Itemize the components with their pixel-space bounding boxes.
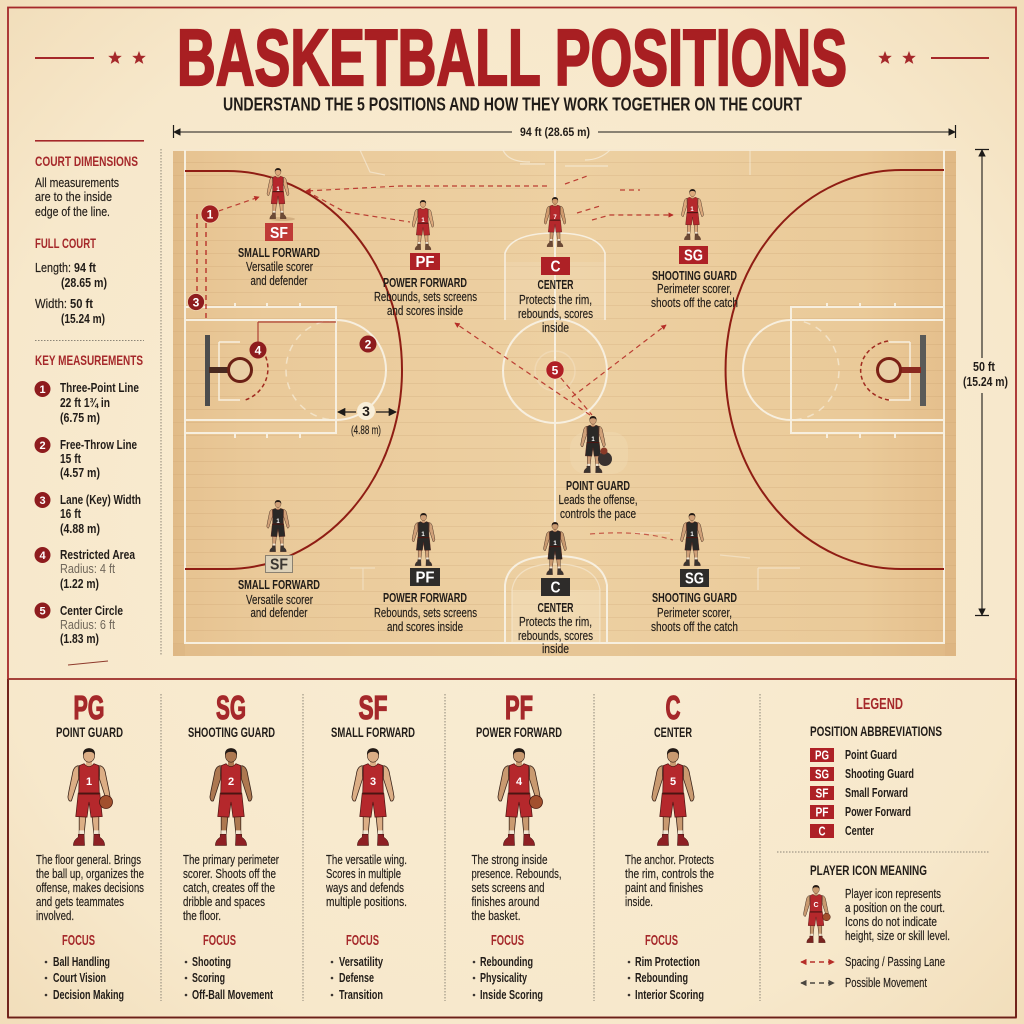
panel: shooting guard: FOCUS: [203, 932, 236, 949]
key marker 2: [360, 336, 376, 352]
player: power forward, red team: POWER FORWARD: [383, 275, 467, 290]
player: power forward, red team: 1: [421, 218, 425, 224]
panel: shooting guard: SHOOTING GUARD: [188, 724, 275, 740]
player: center, black team: 1: [553, 541, 557, 547]
panel: legend: LEGEND: [856, 696, 903, 713]
legend row: PF: [810, 805, 911, 820]
key marker 2: 2: [365, 338, 372, 352]
player: small forward, red team: SF: [270, 225, 288, 242]
arrow: spacing / passing lane: [801, 961, 834, 963]
label: possible movement: Possible Movement: [845, 976, 927, 990]
player: small forward, red team: Versatile scorer: [246, 260, 313, 274]
panel: power forward: FOCUS: [491, 932, 524, 949]
player: small forward, black team: [238, 500, 320, 620]
legend row: PF: Power Forward: [845, 805, 911, 819]
player: small forward, red team: and defender: [250, 274, 308, 288]
text block: full court size: (28.65 m): [61, 275, 107, 290]
player: shooting guard, black team: Perimeter scorer,: [657, 606, 732, 620]
icon: shooting guard player: [210, 748, 252, 846]
player: small forward, black team: 1: [276, 519, 280, 525]
panel: point guard: The floor general. Brings: [36, 852, 141, 867]
panel: point guard: FOCUS: [62, 932, 95, 949]
panel: point guard: and gets teammates: [36, 894, 124, 909]
player: shooting guard, red team: SG: [684, 248, 703, 264]
icon: power forward player: 4: [516, 776, 523, 788]
icon: point guard player: [68, 748, 112, 846]
text block: full court size: [35, 260, 107, 326]
icon: center player: [652, 748, 694, 846]
player: small forward, black team: and defender: [250, 606, 308, 620]
lane width callout: (4.88 m): [351, 423, 381, 437]
text block: full court size: 94 ft: [74, 260, 97, 275]
key marker 3: [188, 294, 204, 310]
player: shooting guard, red team: SHOOTING GUARD: [652, 268, 737, 283]
player: center, black team: inside: [542, 642, 569, 656]
player: power forward, black team: POWER FORWARD: [383, 590, 467, 605]
measurement 2: 15 ft: [60, 451, 82, 466]
key marker 1: [201, 205, 219, 223]
player: shooting guard, red team: shoots off the catch: [651, 296, 738, 310]
measurement 1: [34, 380, 139, 425]
measurement 4: 4: [39, 550, 46, 562]
text block: full court size: Width:: [35, 296, 67, 311]
player: power forward, red team: PF: [416, 254, 435, 271]
player: point guard, black team: POINT GUARD: [566, 478, 630, 493]
player: small forward, black team: SMALL FORWARD: [238, 577, 320, 592]
key marker 1: 1: [207, 208, 214, 222]
measurement 2: Free-Throw Line: [60, 437, 137, 452]
player: small forward, black team: Versatile scorer: [246, 593, 313, 607]
legend row: SF: SF: [816, 786, 829, 800]
panel: power forward: Inside Scoring: [480, 987, 543, 1002]
panel: center: The anchor. Protects: [625, 852, 714, 867]
panel: legend: POSITION ABBREVIATIONS: [810, 723, 942, 739]
player: shooting guard, black team: 1: [690, 532, 694, 538]
panel: small forward: ways and defends: [325, 880, 404, 895]
icon: small forward player: 3: [370, 776, 376, 788]
legend row: SF: Small Forward: [845, 786, 908, 800]
text block: measurement note: [35, 175, 119, 219]
panel: shooting guard: The primary perimeter: [183, 852, 279, 867]
player: shooting guard, red team: 1: [690, 207, 694, 213]
panel: small forward: SF: [358, 689, 388, 726]
player: center, black team: CENTER: [538, 600, 574, 615]
panel: point guard: offense, makes decisions: [36, 880, 144, 895]
heading: full court: FULL COURT: [35, 235, 96, 251]
panel: small forward: Transition: [339, 987, 383, 1002]
decoration: right stars and line: [878, 51, 989, 64]
player: shooting guard, red team: [651, 189, 738, 310]
panel: shooting guard: Off-Ball Movement: [192, 987, 273, 1002]
measurement 4: Radius: 4 ft: [60, 561, 115, 576]
measurement 5: (1.83 m): [60, 631, 99, 646]
player: center, black team: [518, 522, 593, 656]
panel: center: paint and finishes: [625, 880, 703, 895]
icon: power forward player: [498, 748, 542, 846]
player: shooting guard, red team: Perimeter scorer,: [657, 282, 732, 296]
panel: power forward: PF: [505, 689, 533, 726]
player: small forward, red team: 1: [276, 187, 280, 193]
player: power forward, red team: [374, 200, 477, 318]
panel: point guard: PG: [74, 689, 104, 726]
measurement 2: [34, 437, 137, 480]
measurement 3: 3: [39, 495, 46, 507]
court floor: [173, 149, 956, 656]
arrow: possible movement: [801, 982, 834, 984]
text block: player icon note: [845, 887, 950, 943]
text block: full court size: Length:: [35, 260, 71, 275]
panel: power forward: POWER FORWARD: [476, 724, 562, 740]
player: center, black team: C: [550, 580, 561, 596]
panel: point guard: the ball up, organizes the: [36, 866, 144, 881]
measurement 3: 16 ft: [60, 506, 82, 521]
panel: shooting guard: SG: [216, 689, 246, 726]
measurement 1: Three-Point Line: [60, 380, 139, 395]
player: small forward, red team: SMALL FORWARD: [238, 245, 320, 260]
measurement 4: Restricted Area: [60, 547, 136, 562]
legend row: PG: [810, 748, 897, 762]
panel: small forward: Defense: [339, 970, 374, 985]
panel: center: C: [666, 689, 680, 726]
text block: full court size: 50 ft: [70, 296, 94, 311]
panel: shooting guard: Shooting: [192, 954, 231, 969]
court length dimension: 94 ft (28.65 m): [520, 125, 590, 139]
column dividers: [161, 694, 760, 1001]
legend row: SG: SG: [815, 768, 829, 782]
measurement 5: 5: [39, 606, 46, 618]
player: center, red team: C: [550, 258, 561, 276]
measurement 5: Radius: 6 ft: [60, 617, 115, 632]
player: point guard, black team: [558, 416, 638, 521]
backboard and rim left: [205, 335, 268, 406]
player: power forward, black team: Rebounds, sets screens: [374, 606, 477, 620]
measurement 2: (4.57 m): [60, 465, 100, 480]
court lines: [185, 150, 944, 643]
player: center, black team: Protects the rim,: [519, 615, 592, 629]
panel: power forward: [472, 689, 562, 1002]
player: shooting guard, black team: SHOOTING GUARD: [652, 590, 737, 605]
text block: measurement note: are to the inside: [35, 189, 112, 204]
panel: shooting guard: [183, 689, 279, 1002]
basketball court: [173, 149, 956, 656]
text block: player icon note: Icons do not indicate: [845, 915, 937, 929]
panel: shooting guard: catch, creates off the: [183, 880, 275, 895]
measurement 1: 1: [39, 384, 46, 396]
panel: small forward: multiple positions.: [326, 894, 407, 909]
player: power forward, red team: and scores inside: [387, 304, 463, 318]
panel: small forward: Scores in multiple: [326, 866, 401, 881]
measurement 2: 2: [39, 440, 46, 452]
legend row: C: C: [818, 824, 826, 838]
icon: small forward player: [352, 748, 394, 846]
legend row: C: [810, 824, 874, 838]
heading: court dimensions: COURT DIMENSIONS: [35, 153, 138, 169]
icon: center player: 5: [670, 776, 676, 788]
panel: point guard: Court Vision: [53, 970, 106, 985]
panel: power forward: presence. Rebounds,: [472, 866, 562, 881]
panel: power forward: Rebounding: [480, 954, 533, 969]
panel: small forward: FOCUS: [346, 932, 379, 949]
panel: shooting guard: dribble and spaces: [183, 894, 265, 909]
player: point guard, black team: Leads the offense,: [558, 493, 638, 507]
legend row: PF: PF: [816, 806, 829, 820]
decoration: left line and stars: [35, 51, 146, 64]
panel: legend: PLAYER ICON MEANING: [810, 862, 927, 878]
player: center, black team: rebounds, scores: [518, 629, 593, 643]
measurement 5: [34, 602, 123, 646]
panel: center: Rebounding: [635, 970, 688, 985]
legend row: PG: Point Guard: [845, 748, 897, 762]
measurement 3: [34, 492, 141, 536]
player: center, red team: [518, 197, 593, 335]
measurement 4: [34, 547, 136, 591]
panel: power forward: The strong inside: [472, 852, 548, 867]
panel: power forward: sets screens and: [472, 880, 544, 895]
text block: player icon note: a position on the court.: [845, 901, 945, 915]
court width dimension: [963, 150, 1008, 616]
player: center, red team: Protects the rim,: [519, 293, 592, 307]
player: point guard, black team: controls the pace: [560, 507, 636, 521]
player: power forward, black team: and scores inside: [387, 620, 463, 634]
panel: small forward: Versatility: [339, 954, 384, 969]
player: center, red team: rebounds, scores: [518, 307, 593, 321]
player: shooting guard, black team: SG: [685, 570, 704, 588]
player: center, red team: 7: [553, 215, 557, 221]
key marker 4: 4: [255, 344, 262, 358]
panel: center: CENTER: [654, 724, 692, 740]
key marker 3: 3: [193, 296, 200, 310]
measurement 1: (6.75 m): [60, 410, 100, 425]
court width dimension: (15.24 m): [963, 375, 1008, 389]
panel: shooting guard: the floor.: [183, 908, 221, 923]
measurement 3: (4.88 m): [60, 521, 100, 536]
legend row: C: Center: [845, 824, 874, 838]
player: shooting guard, black team: [651, 513, 738, 634]
key marker 5: 5: [552, 364, 559, 378]
panel: center: Interior Scoring: [635, 987, 704, 1002]
text block: player icon note: height, size or skill level.: [845, 929, 950, 943]
player: point guard, black team: 1: [591, 437, 595, 443]
panel: point guard: POINT GUARD: [56, 724, 123, 740]
player: power forward, black team: [374, 513, 477, 634]
icon: shooting guard player: 2: [228, 776, 234, 788]
text block: player icon note: Player icon represents: [845, 887, 941, 901]
key marker 4: [250, 342, 266, 358]
legend row: SF: [810, 786, 908, 800]
panel: point guard: Ball Handling: [53, 954, 110, 969]
measurement 3: Lane (Key) Width: [60, 492, 141, 507]
panel: power forward: finishes around: [472, 894, 540, 909]
panel: center: [625, 689, 714, 1002]
three-point line right: [726, 170, 944, 569]
legend row: SG: [810, 767, 914, 782]
legend row: PG: PG: [815, 748, 829, 762]
panel: legend: [777, 696, 989, 990]
icon: point guard player: 1: [86, 776, 92, 788]
panel: shooting guard: Scoring: [192, 970, 225, 985]
lane width callout: 3: [362, 403, 370, 419]
three-point line left: [185, 171, 402, 569]
panel: power forward: the basket.: [472, 908, 520, 923]
panel: small forward: [325, 689, 415, 1002]
player: power forward, black team: PF: [416, 570, 435, 586]
court length dimension: [174, 125, 956, 139]
soft patch around centre key: [570, 432, 628, 474]
panel: power forward: Physicality: [480, 970, 528, 985]
panel: court dimensions sidebar: [34, 140, 161, 665]
lane width callout: [338, 402, 396, 437]
panel: center: Rim Protection: [635, 954, 700, 969]
panel: center: the rim, controls the: [625, 866, 714, 881]
panel: small forward: The versatile wing.: [326, 852, 407, 867]
player: center, red team: CENTER: [538, 277, 574, 292]
panel: small forward: SMALL FORWARD: [331, 724, 415, 740]
player: power forward, black team: 1: [421, 532, 425, 538]
player: power forward, red team: Rebounds, sets screens: [374, 290, 477, 304]
subtitle: UNDERSTAND THE 5 POSITIONS AND HOW THEY WORK TOGETHER ON THE COURT: [223, 94, 802, 114]
text block: measurement note: edge of the line.: [35, 204, 110, 219]
player: small forward, red team: [238, 168, 320, 288]
panel: point guard: Decision Making: [53, 987, 124, 1002]
text block: measurement note: All measurements: [35, 175, 119, 190]
backboard and rim right: [861, 335, 926, 406]
measurement 4: (1.22 m): [60, 576, 99, 591]
measurement 1: 22 ft 1¾ in: [60, 395, 110, 410]
court width dimension: 50 ft: [973, 360, 996, 374]
panel: point guard: involved.: [36, 908, 74, 923]
player: center, red team: inside: [542, 321, 569, 335]
player: small forward, black team: SF: [270, 556, 288, 574]
panel: point guard: [36, 689, 144, 1002]
legend row: SG: Shooting Guard: [845, 767, 914, 781]
key marker 5: [546, 361, 564, 379]
text block: full court size: (15.24 m): [61, 311, 105, 326]
panel: center: inside.: [625, 894, 653, 909]
measurement 5: Center Circle: [60, 603, 123, 618]
player: shooting guard, black team: shoots off the catch: [651, 620, 738, 634]
panel: shooting guard: scorer. Shoots off the: [183, 866, 276, 881]
heading: key measurements: KEY MEASUREMENTS: [35, 352, 143, 368]
passing lanes: red dashed arrows: [197, 175, 673, 540]
icon: legend player: C: [813, 902, 819, 909]
panel: center: FOCUS: [645, 932, 678, 949]
icon: legend player: [804, 885, 830, 943]
label: spacing / passing lane: Spacing / Passing Lane: [845, 955, 945, 969]
